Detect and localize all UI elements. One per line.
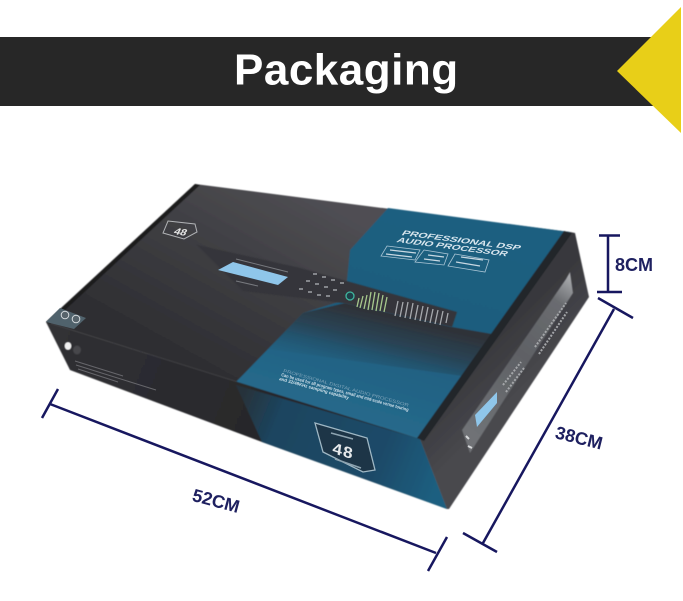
dimension: height 8CM [597, 236, 653, 292]
lid description text: PROFESSIONAL DIGITAL AUDIO PROCESSOR [283, 368, 410, 408]
device illustration on lid [197, 245, 457, 327]
dimension: width 52CM [42, 389, 447, 571]
header banner [0, 37, 655, 106]
box faces [46, 184, 589, 509]
green level meters [357, 292, 387, 312]
front lights [64, 342, 81, 354]
lid description text: and 32/48KHz sampling capability [279, 376, 350, 400]
dimension: height 8CM: 8CM [615, 255, 653, 275]
dimension: width 52CM: 52CM [190, 485, 242, 517]
rotary knob [346, 292, 354, 300]
front shield badge: 48 [332, 439, 355, 463]
lid heading [395, 229, 523, 258]
grey level meters [395, 301, 448, 325]
front shield badge [315, 423, 375, 472]
dimension: depth 38CM [463, 298, 633, 552]
lid description text: Can be used for all program types, small and mid-scale venue touring [281, 372, 409, 412]
small badge on lid [163, 221, 197, 239]
side meters [503, 303, 567, 392]
screen captions [236, 259, 288, 286]
lid heading: PROFESSIONAL DSP [400, 229, 523, 252]
dimension: depth 38CM: 38CM [553, 422, 605, 454]
banner title: Packaging [234, 46, 459, 94]
round logos [46, 308, 86, 329]
LCD screen [218, 262, 288, 285]
side LCD [475, 392, 497, 427]
small badge on lid: 48 [172, 227, 189, 238]
keypad [299, 274, 344, 296]
side device image [462, 272, 573, 453]
lid heading: AUDIO PROCESSOR [395, 236, 511, 258]
packaging box [46, 184, 589, 509]
lid feature boxes [381, 246, 489, 272]
front fine print [75, 361, 156, 390]
yellow corner triangle [617, 7, 681, 133]
